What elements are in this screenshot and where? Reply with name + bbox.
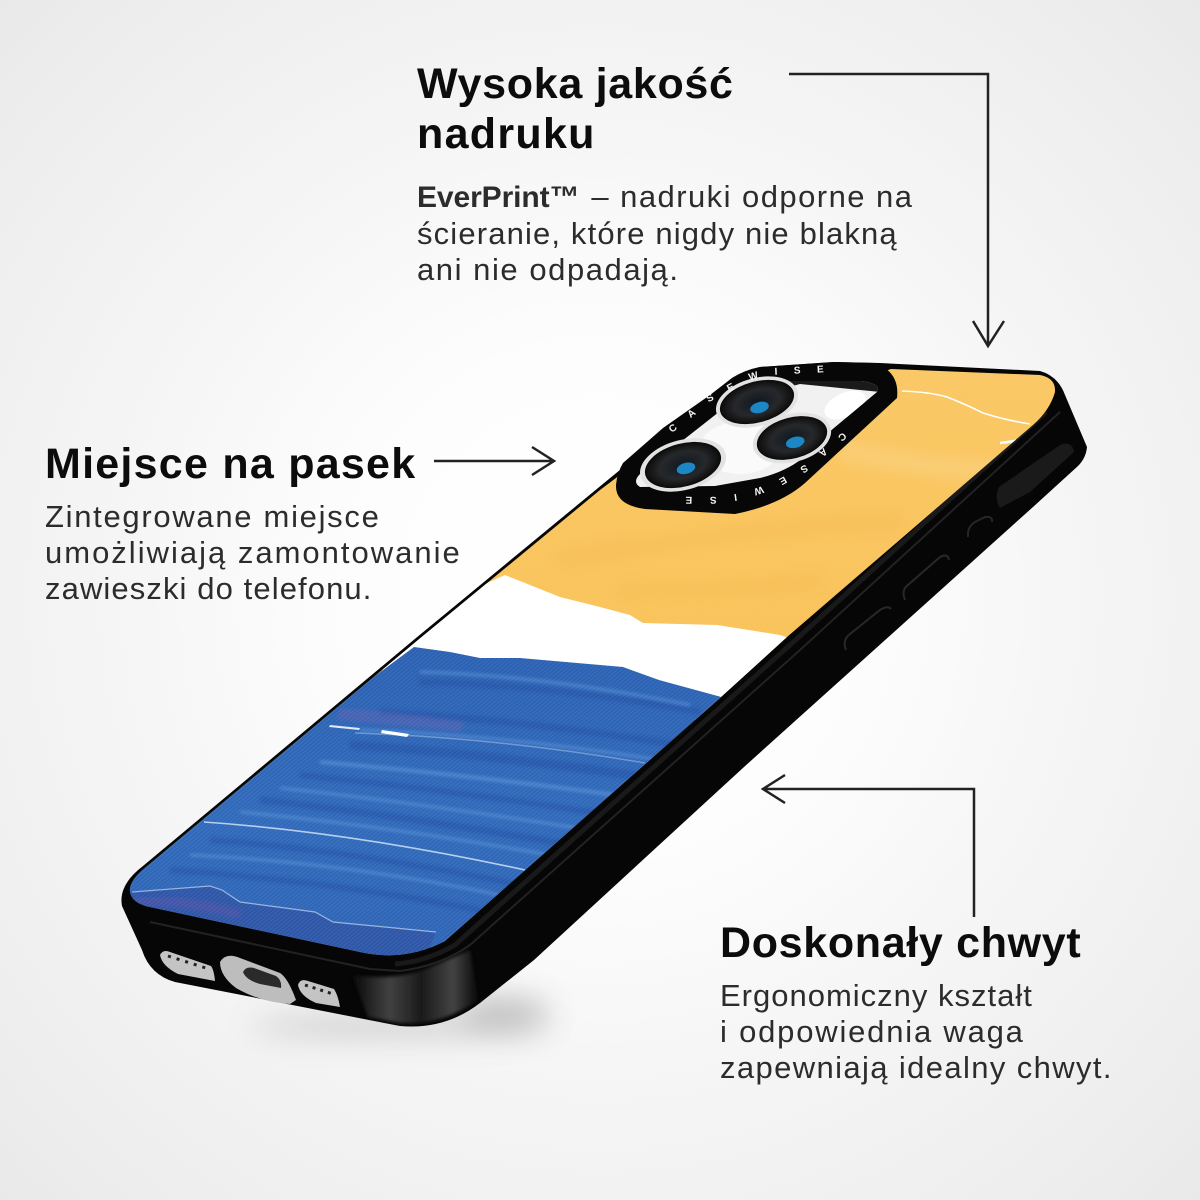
glass area: [636, 381, 878, 487]
heading: print quality: Wysoka jakość: [417, 60, 734, 108]
heading: print quality: [417, 60, 734, 158]
glossy corner: [352, 950, 478, 1023]
arrow: strap: [434, 446, 556, 476]
text: strap: zawieszki do telefonu.: [45, 571, 372, 606]
shadow under phone: [250, 996, 550, 1038]
side button: volume up: [904, 556, 949, 600]
blue paint: [130, 647, 721, 956]
bottom ports: [160, 951, 340, 1007]
text: grip: i odpowiednia waga: [720, 1014, 1025, 1049]
brand text: CASEWISE: [669, 366, 824, 432]
faint paint line: [355, 733, 645, 763]
text: strap: umożliwiają zamontowanie: [45, 535, 462, 570]
printed back: [130, 369, 1056, 956]
heading: strap: Miejsce na pasek: [45, 440, 416, 488]
case body: [121, 362, 1087, 1027]
phone case illustration: [121, 362, 1087, 1050]
arrow: grip: [760, 774, 976, 917]
lens 2: [747, 404, 837, 472]
text: print quality: ani nie odpadają.: [417, 252, 680, 287]
text: print quality: EverPrint™ – nadruki odporne na: [417, 179, 913, 214]
right speaker: [298, 980, 340, 1007]
lower dark blue paint: [130, 886, 436, 956]
arrow: print quality: [789, 72, 1005, 348]
white paint line: [204, 822, 525, 870]
white band: [360, 575, 795, 720]
text: print quality: [417, 179, 913, 287]
text: print quality: ścieranie, które nigdy nie blakną: [417, 216, 898, 251]
heading: grip: Doskonały chwyt: [720, 919, 1081, 967]
lens 3: [634, 429, 732, 501]
scuff highlights: [329, 725, 409, 737]
yellow brush strokes: [840, 442, 992, 480]
brand text: [669, 366, 846, 504]
heading: print quality: nadruku: [417, 110, 596, 158]
inner lip: [150, 412, 1060, 971]
text: strap: [45, 499, 462, 606]
charging port: [220, 956, 296, 1004]
text: grip: Ergonomiczny kształt: [720, 978, 1033, 1013]
side button: action: [968, 517, 992, 537]
white line on yellow: [902, 391, 1030, 424]
text: grip: [720, 978, 1113, 1085]
blue brush strokes: [170, 682, 700, 910]
text: strap: Zintegrowane miejsce: [45, 499, 381, 534]
left speaker: [160, 951, 215, 981]
inner wall shadow: [789, 381, 878, 392]
text: grip: zapewniają idealny chwyt.: [720, 1050, 1113, 1085]
side button: volume down: [845, 607, 891, 650]
speaker flap: [997, 444, 1074, 508]
brand text: CASEWISE: [686, 434, 846, 504]
camera module: [616, 362, 898, 514]
lens 1: [710, 368, 804, 436]
